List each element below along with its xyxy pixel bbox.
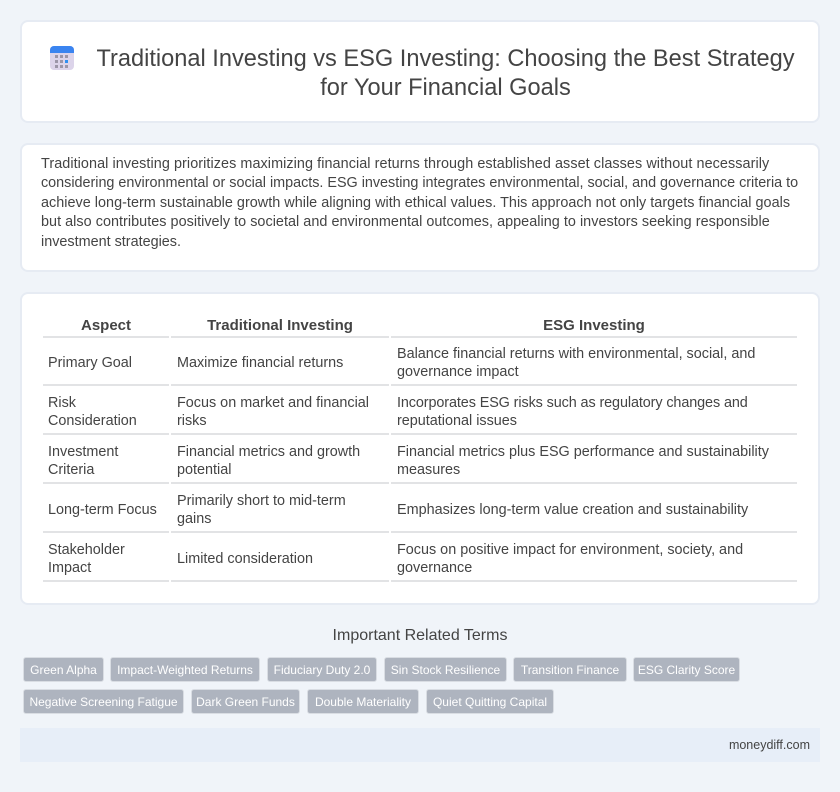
panel: comparison table (20, 292, 820, 605)
related terms chips: Impact-Weighted Returns (117, 663, 253, 677)
related terms chips: Double Materiality (315, 695, 411, 709)
icon: calendar (50, 46, 74, 70)
row: risk consideration: reputational issues (397, 413, 517, 429)
related terms chips: Dark Green Funds (196, 695, 295, 709)
row: investment criteria: Criteria (48, 462, 94, 478)
row: investment criteria: potential (177, 462, 231, 478)
row: stakeholder impact: Focus on positive impact for environment, society, and (397, 542, 743, 558)
title (96, 46, 795, 101)
related terms chips: Transition Finance (521, 663, 619, 677)
row: risk consideration: Incorporates ESG risks such as regulatory changes and (397, 395, 748, 411)
row: primary goal: Maximize financial returns (177, 355, 343, 371)
row: risk consideration: risks (177, 413, 207, 429)
row: primary goal: Balance financial returns with environmental, social, and (397, 346, 755, 362)
table header row: Traditional Investing (207, 317, 353, 334)
row: risk consideration: Focus on market and financial (177, 395, 369, 411)
panel: title header (20, 20, 820, 123)
intro paragraph: considering environmental or social impacts. ESG investing integrates environmental, social, and governance criteria to (41, 175, 798, 191)
row: stakeholder impact: governance (397, 560, 472, 576)
intro paragraph (41, 156, 798, 250)
heading: related terms: Important Related Terms (333, 627, 507, 644)
row: stakeholder impact: Impact (48, 560, 91, 576)
related terms chips: Sin Stock Resilience (391, 663, 500, 677)
table header row: Aspect (81, 317, 131, 334)
row: investment criteria (48, 444, 769, 478)
related terms chips: Fiduciary Duty 2.0 (274, 663, 370, 677)
row: primary goal (48, 346, 755, 380)
intro paragraph: but also contributes positively to societal and environmental outcomes, appealing to investors seeking responsible (41, 214, 770, 230)
title: for Your Financial Goals (320, 75, 571, 101)
row: investment criteria: measures (397, 462, 460, 478)
row: risk consideration (48, 395, 748, 429)
row: long-term focus: gains (177, 511, 211, 527)
row: primary goal: Primary Goal (48, 355, 132, 371)
intro paragraph: achieve long-term sustainable growth while aligning with ethical values. This approach not only targets financial goals (41, 195, 790, 211)
row: long-term focus: Emphasizes long-term value creation and sustainability (397, 502, 748, 518)
row: primary goal: governance impact (397, 364, 519, 380)
row: investment criteria: Investment (48, 444, 118, 460)
footer bar (20, 728, 820, 762)
row: stakeholder impact (48, 542, 743, 576)
row: long-term focus: Long-term Focus (48, 502, 157, 518)
row: investment criteria: Financial metrics and growth (177, 444, 360, 460)
related terms chips: Green Alpha (30, 663, 97, 677)
related terms chips: ESG Clarity Score (638, 663, 735, 677)
intro paragraph: Traditional investing prioritizes maximizing financial returns through established asset classes without necessarily (41, 156, 769, 172)
panel: intro text (20, 143, 820, 272)
row: risk consideration: Consideration (48, 413, 137, 429)
row: stakeholder impact: Limited consideration (177, 551, 313, 567)
row: long-term focus (48, 493, 748, 527)
title: Traditional Investing vs ESG Investing: Choosing the Best Strategy (96, 46, 795, 72)
footer source: moneydiff.com (729, 738, 810, 752)
intro paragraph: investment strategies. (41, 234, 181, 250)
related terms chips: Negative Screening Fatigue (29, 695, 178, 709)
row: long-term focus: Primarily short to mid-term (177, 493, 346, 509)
related terms chips: Quiet Quitting Capital (433, 695, 547, 709)
related terms chips (23, 657, 740, 714)
table header row (81, 317, 645, 334)
row: risk consideration: Risk (48, 395, 76, 411)
table header row: ESG Investing (543, 317, 645, 334)
row: investment criteria: Financial metrics plus ESG performance and sustainability (397, 444, 769, 460)
row: stakeholder impact: Stakeholder (48, 542, 125, 558)
